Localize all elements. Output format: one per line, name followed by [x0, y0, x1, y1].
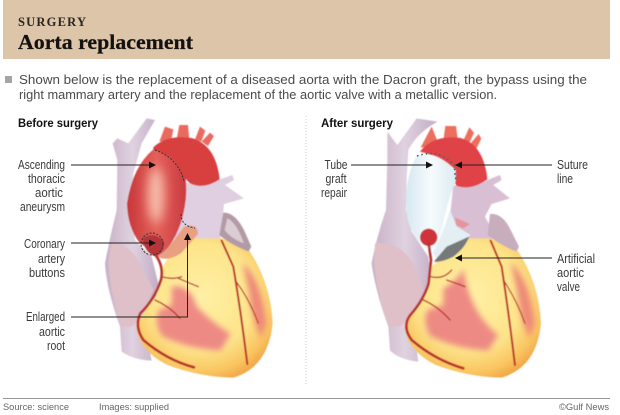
- after surgery heading: After surgery: [321, 118, 394, 130]
- label: enlarged aortic root: root: [47, 339, 65, 353]
- before surgery heading: Before surgery: [18, 118, 99, 130]
- heart illustration: after surgery: [372, 118, 541, 378]
- intro text: [19, 73, 587, 102]
- section label: SURGERY: [18, 15, 86, 29]
- label: coronary artery buttons: Coronary: [24, 237, 66, 251]
- intro text: Shown below is the replacement of a diseased aorta with the Dacron graft, the bypass using the: [19, 73, 587, 87]
- label: coronary artery buttons: artery: [38, 252, 66, 266]
- label: enlarged aortic root: aortic: [39, 325, 65, 339]
- label: ascending thoracic aortic aneurysm: Ascending: [18, 158, 65, 172]
- label: coronary artery buttons: buttons: [29, 266, 65, 280]
- label: suture line: [557, 158, 588, 186]
- label: ascending thoracic aortic aneurysm: [18, 158, 65, 214]
- panel divider: [305, 116, 307, 384]
- label: artificial aortic valve: Artificial: [557, 252, 595, 266]
- dashed suture marks: before: [141, 150, 195, 255]
- copyright: ©Gulf News: [559, 402, 609, 413]
- label: coronary artery buttons: [24, 237, 66, 280]
- label: ascending thoracic aortic aneurysm: thoracic: [28, 172, 65, 186]
- arrow: artificial valve: [455, 254, 552, 262]
- footer rule: [3, 398, 610, 400]
- arrow: coronary buttons: [71, 240, 156, 246]
- label: tube graft repair: repair: [321, 186, 347, 200]
- label: ascending thoracic aortic aneurysm: aortic: [35, 186, 63, 200]
- label: artificial aortic valve: aortic: [557, 266, 584, 280]
- arrow: tube graft: [351, 162, 433, 168]
- label: ascending thoracic aortic aneurysm: aneurysm: [20, 200, 65, 214]
- label: tube graft repair: [321, 158, 348, 200]
- arrow: aortic root: [71, 233, 191, 317]
- label: artificial aortic valve: [557, 252, 595, 294]
- label: suture line: line: [557, 172, 573, 186]
- arrow: suture line: [455, 162, 552, 168]
- source credit: Source: science: [3, 402, 69, 413]
- label: tube graft repair: graft: [326, 172, 347, 186]
- suture line dots: after: [417, 154, 456, 180]
- images credit: Images: supplied: [99, 402, 169, 413]
- header band: [3, 0, 610, 59]
- label: tube graft repair: Tube: [324, 158, 348, 172]
- intro bullet: [5, 76, 12, 83]
- title: Aorta replacement: [18, 30, 194, 54]
- label: artificial aortic valve: valve: [557, 280, 580, 294]
- label: enlarged aortic root: Enlarged: [26, 310, 65, 324]
- intro text: right mammary artery and the replacement of the aortic valve with a metallic version.: [19, 88, 497, 102]
- heart illustration: before surgery: [105, 118, 273, 378]
- arrow: aneurysm: [71, 162, 156, 168]
- label: enlarged aortic root: [26, 310, 65, 353]
- label: suture line: Suture: [557, 158, 588, 172]
